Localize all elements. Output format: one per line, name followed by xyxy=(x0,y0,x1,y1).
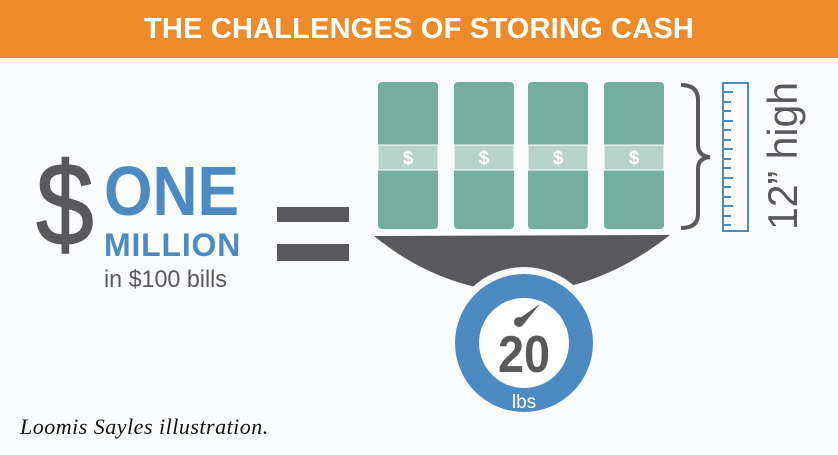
text: MILLION: MILLION xyxy=(104,227,241,263)
ruler xyxy=(723,83,748,231)
text: 12" high: 12” high xyxy=(759,82,806,230)
equals sign xyxy=(277,207,349,261)
dollar sign: $ xyxy=(36,139,94,271)
cash stacks: $ xyxy=(553,148,564,169)
weight dial: 20 lbs: 20 xyxy=(498,326,550,384)
cash stacks: $ xyxy=(479,148,490,169)
weight dial: 20 lbs xyxy=(448,267,600,419)
weight dial: 20 lbs: lbs xyxy=(512,392,536,413)
cash stacks: $ xyxy=(629,148,640,169)
title banner xyxy=(0,0,838,58)
cash stacks: $ xyxy=(403,148,414,169)
text: ONE: ONE xyxy=(104,152,239,230)
credit: Loomis Sayles illustration. xyxy=(20,414,269,439)
scale bowl xyxy=(374,235,670,293)
text: in $100 bills: in $100 bills xyxy=(104,266,227,293)
brace xyxy=(681,85,710,228)
title banner: THE CHALLENGES OF STORING CASH xyxy=(144,13,694,45)
cash stacks xyxy=(378,82,664,229)
